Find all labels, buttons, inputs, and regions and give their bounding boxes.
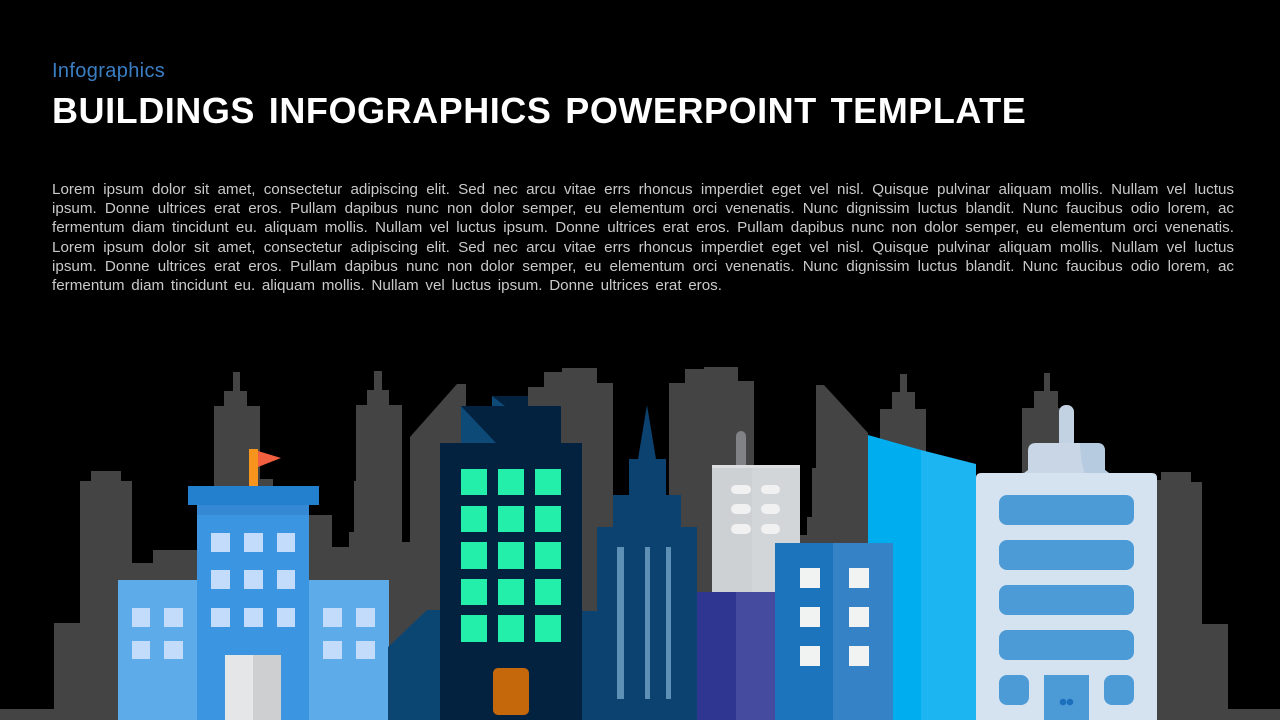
right wing <box>309 580 389 720</box>
wide windows <box>999 495 1134 705</box>
tower vertical stripes <box>617 547 671 699</box>
text block: lorem ipsum paragraph: Lorem ipsum dolor sit amet, consectetur adipiscing elit. Sed nec arcu vitae errs rhoncus imperdiet eget vel nisl. Quisque pulvinar aliquam mollis. Nullam vel luctus <box>52 239 1234 256</box>
central tower <box>197 505 309 720</box>
grey body <box>712 465 800 592</box>
building: low dark blue annex <box>388 610 440 720</box>
building: navy tower with green windows <box>440 396 582 720</box>
text block: lorem ipsum paragraph: ipsum. Donne ultrices erat eros. Pullam dapibus nunc non dolor semper, eu elementum orci venenatis. Nunc dignissim luctus blandit. Nunc faucibus odio lorem, ac <box>52 258 1234 275</box>
white windows <box>800 568 869 666</box>
building: cyan glass tower <box>868 435 976 720</box>
building: blue block <box>775 543 893 720</box>
building: spire tower <box>582 405 697 720</box>
orange door <box>493 668 529 715</box>
roof facets <box>461 396 505 443</box>
rooftop antenna <box>1059 405 1074 450</box>
skyline silhouette <box>0 367 1280 720</box>
text block: lorem ipsum paragraph: fermentum diam tincidunt eu. aliquam mollis. Nullam vel luctus ipsum. Donne ultrices erat eros. <box>52 277 722 294</box>
title: BUILDINGS INFOGRAPHICS POWERPOINT TEMPLATE <box>52 90 1026 131</box>
green windows <box>461 469 561 642</box>
navy body <box>440 396 582 720</box>
tower body <box>582 405 697 720</box>
windows <box>132 533 375 659</box>
door <box>225 655 281 720</box>
building: light blue office with flag <box>118 449 389 720</box>
subtitle: Infographics: Infographics <box>52 60 165 82</box>
text block: lorem ipsum paragraph: Lorem ipsum dolor sit amet, consectetur adipiscing elit. Sed nec arcu vitae errs rhoncus imperdiet eget vel nisl. Quisque pulvinar aliquam mollis. Nullam vel luctus <box>52 181 1234 198</box>
tower body <box>976 473 1157 720</box>
rooftop block <box>1024 443 1109 473</box>
door with handles <box>1044 675 1089 720</box>
building: pale blue tower <box>976 405 1157 720</box>
building: grey tower <box>712 431 800 592</box>
flag pole <box>249 449 258 486</box>
antenna <box>736 431 746 471</box>
flag <box>258 451 281 467</box>
text block: lorem ipsum paragraph: fermentum diam tincidunt eu. aliquam mollis. Nullam vel luctus ipsum. Donne ultrices erat eros. Pullam dapibus nunc non dolor semper, eu elementum orci venenatis. <box>52 219 1234 236</box>
roof cap <box>188 486 319 505</box>
building: purple block <box>697 592 775 720</box>
pill windows <box>731 485 780 534</box>
text block: lorem ipsum paragraph <box>52 181 1234 294</box>
text block: lorem ipsum paragraph: ipsum. Donne ultrices erat eros. Pullam dapibus nunc non dolor semper, eu elementum orci venenatis. Nunc dignissim luctus blandit. Nunc faucibus odio lorem, ac <box>52 200 1234 217</box>
left wing <box>118 580 197 720</box>
